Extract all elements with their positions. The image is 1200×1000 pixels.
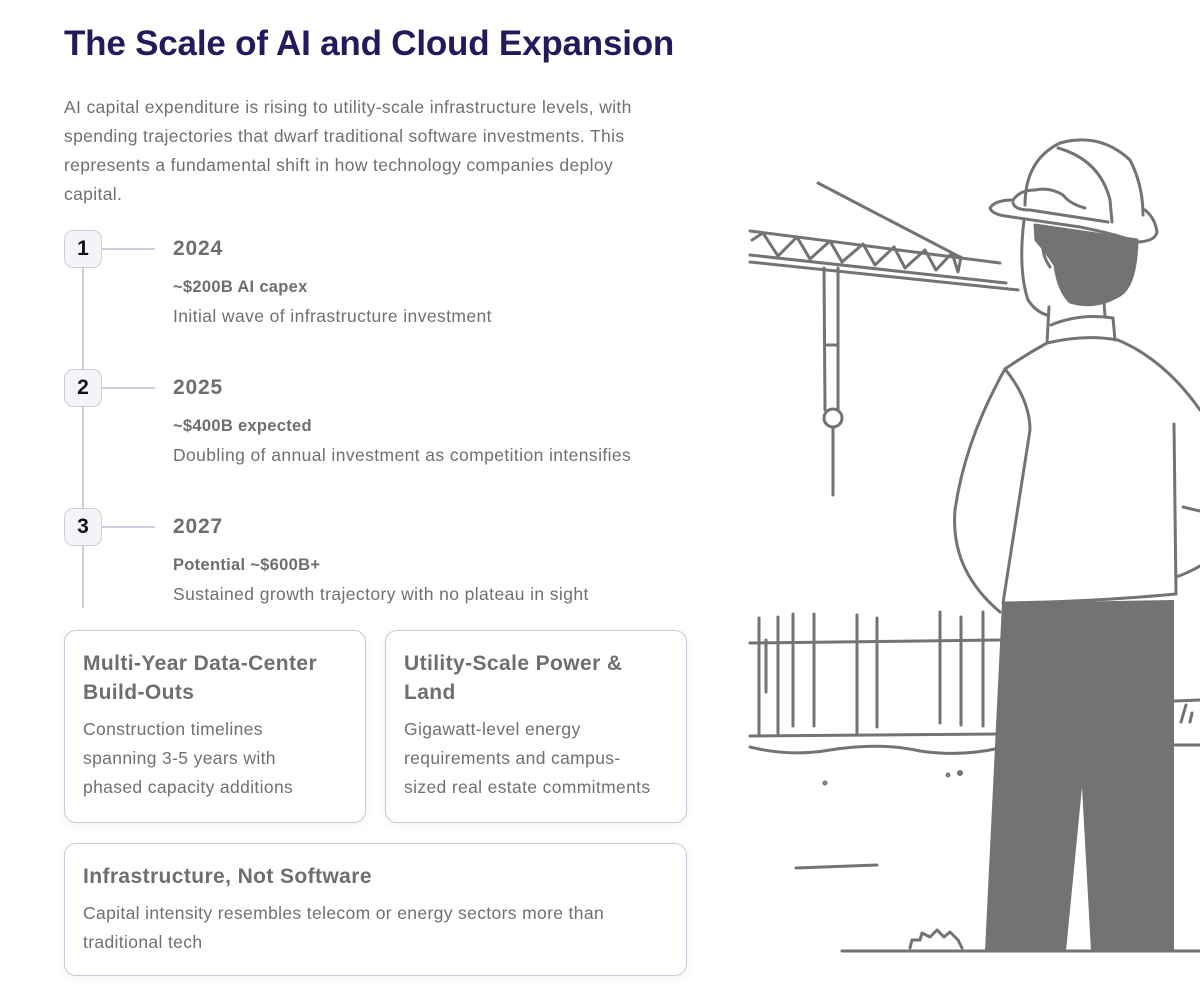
step 2 text: Doubling of annual investment as competition intensifies (173, 445, 631, 465)
card: infrastructure not software: Capital intensity resembles telecom or energy sectors more than (83, 903, 604, 923)
card: data-center build-outs: Multi-Year Data-Center (83, 652, 317, 675)
card: infrastructure not software (64, 843, 687, 976)
fence (750, 612, 1200, 951)
card: data-center build-outs: spanning 3-5 years with (83, 748, 276, 768)
step 1 text (173, 237, 492, 326)
connector 3 (102, 526, 155, 528)
step 3 badge: 3 (77, 515, 89, 538)
step 2 text (173, 376, 631, 465)
card: power & land: Utility-Scale Power & (404, 652, 622, 675)
card: data-center build-outs (64, 630, 366, 823)
step 3 badge (64, 508, 102, 546)
step 1 text: 2024 (173, 237, 223, 260)
step 2 text: 2025 (173, 376, 223, 399)
card: power & land: sized real estate commitments (404, 777, 650, 797)
card: data-center build-outs: Build-Outs (83, 681, 194, 704)
card: power & land: Land (404, 681, 456, 704)
step 1 badge (64, 230, 102, 268)
worker (955, 140, 1200, 951)
step 3 text: Sustained growth trajectory with no plateau in sight (173, 584, 589, 604)
card: infrastructure not software: traditional tech (83, 932, 202, 952)
title: The Scale of AI and Cloud Expansion (64, 24, 674, 63)
step 3 text: Potential ~$600B+ (173, 556, 320, 574)
step 1 badge: 1 (77, 237, 89, 260)
connector 1 (102, 248, 155, 250)
intro paragraph: capital. (64, 184, 122, 204)
timeline vertical line (82, 268, 84, 608)
step 3 text (173, 515, 589, 604)
intro paragraph: spending trajectories that dwarf traditional software investments. This (64, 126, 624, 146)
step 3 text: 2027 (173, 515, 223, 538)
step 2 badge (64, 369, 102, 407)
card: power & land: requirements and campus- (404, 748, 621, 768)
step 2 badge: 2 (77, 376, 89, 399)
step 1 text: ~$200B AI capex (173, 278, 308, 296)
intro paragraph (64, 97, 632, 204)
card: data-center build-outs: Construction timelines (83, 719, 263, 739)
card: data-center build-outs: phased capacity additions (83, 777, 293, 797)
card: infrastructure not software: Infrastructure, Not Software (83, 865, 372, 888)
step 1 text: Initial wave of infrastructure investment (173, 306, 492, 326)
card: power & land (385, 630, 687, 823)
connector 2 (102, 387, 155, 389)
intro paragraph: AI capital expenditure is rising to utility-scale infrastructure levels, with (64, 97, 632, 117)
intro paragraph: represents a fundamental shift in how technology companies deploy (64, 155, 613, 175)
card: power & land: Gigawatt-level energy (404, 719, 581, 739)
step 2 text: ~$400B expected (173, 417, 312, 435)
crane (750, 183, 1018, 495)
